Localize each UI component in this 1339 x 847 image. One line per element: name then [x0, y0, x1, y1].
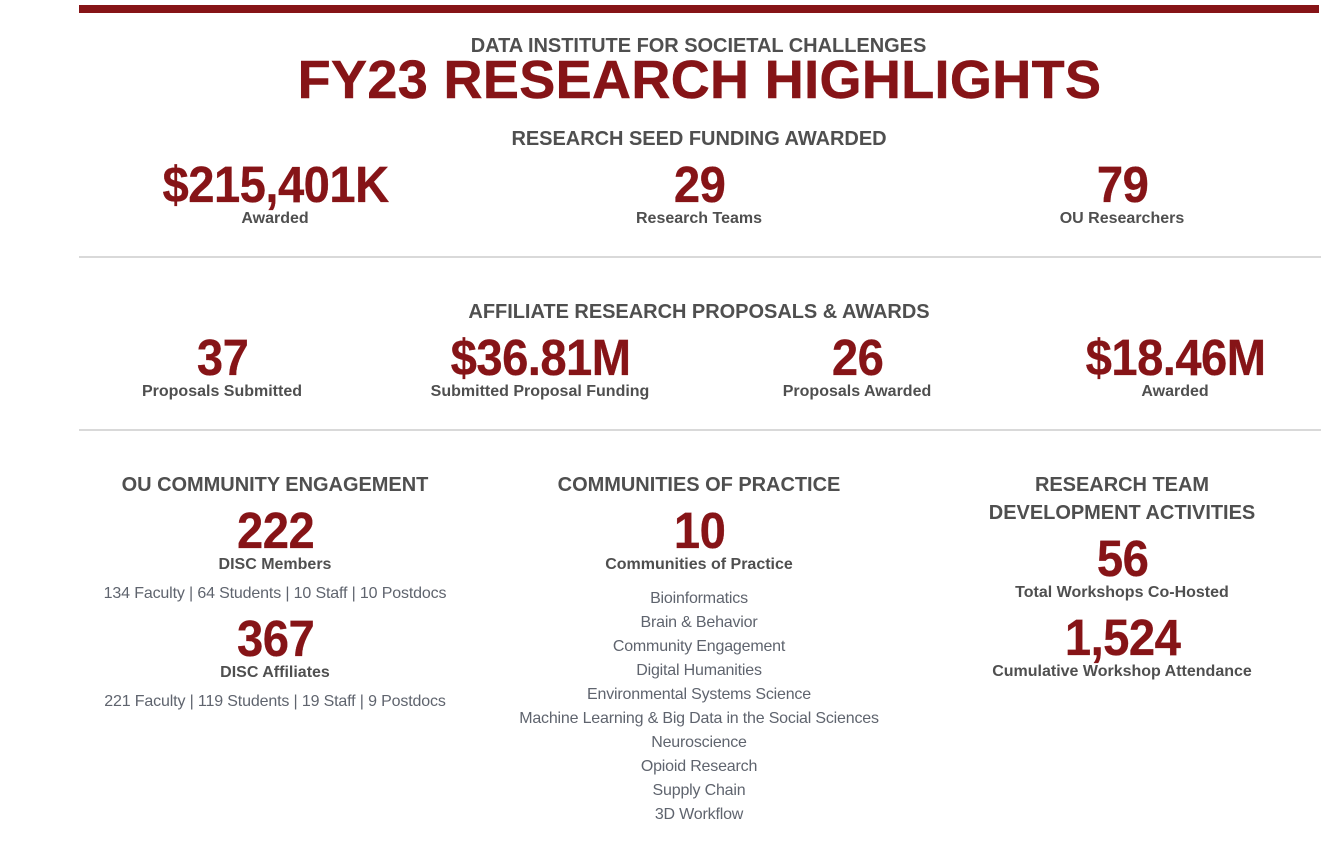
top accent bar [79, 5, 1319, 13]
stat: submitted proposal funding: Submitted Proposal Funding [431, 383, 649, 400]
heading: DEVELOPMENT ACTIVITIES [989, 502, 1255, 524]
heading [989, 474, 1255, 524]
heading: RESEARCH TEAM [1035, 474, 1209, 496]
panel: OU community engagement [104, 474, 446, 710]
list of communities: Environmental Systems Science [587, 686, 811, 703]
stat: research teams: 29 [674, 156, 725, 213]
stat: OU researchers: 79 [1097, 156, 1148, 213]
title: FY23 RESEARCH HIGHLIGHTS [298, 50, 1101, 110]
heading: RESEARCH SEED FUNDING AWARDED [511, 128, 887, 150]
stat: workshop attendance: Cumulative Workshop Attendance [992, 663, 1252, 680]
list of communities: Machine Learning & Big Data in the Social Sciences [519, 710, 879, 727]
heading: COMMUNITIES OF PRACTICE [558, 474, 840, 496]
stat: proposals awarded: 26 [832, 329, 883, 386]
stat: proposals submitted: 37 [197, 329, 248, 386]
stat: proposals awarded [783, 329, 931, 400]
panel: affiliate research proposals and awards [142, 301, 1266, 400]
stat: communities of practice [605, 502, 793, 573]
list of communities: Supply Chain [653, 782, 745, 799]
stat: DISC members: 222 [237, 502, 314, 559]
stat: OU researchers: OU Researchers [1060, 210, 1184, 227]
list of communities: Community Engagement [613, 638, 785, 655]
list of communities: Digital Humanities [636, 662, 762, 679]
list of communities: Opioid Research [641, 758, 757, 775]
affiliate breakdown: 221 Faculty | 119 Students | 19 Staff | 9 Postdocs [104, 693, 446, 710]
stat: proposals awarded: Proposals Awarded [783, 383, 931, 400]
member breakdown: 134 Faculty | 64 Students | 10 Staff | 10 Postdocs [104, 585, 446, 602]
heading: OU COMMUNITY ENGAGEMENT [122, 474, 428, 496]
heading: AFFILIATE RESEARCH PROPOSALS & AWARDS [468, 301, 930, 323]
stat: DISC members: DISC Members [219, 556, 331, 573]
header [298, 35, 1101, 110]
stat: amount awarded: Awarded [241, 210, 309, 227]
stat: amount awarded: $215,401K [163, 156, 389, 213]
list of communities [519, 590, 879, 823]
list of communities: Neuroscience [651, 734, 747, 751]
stat: awarded: $18.46M [1086, 329, 1266, 386]
stat: workshop attendance: 1,524 [1065, 609, 1180, 666]
stat: proposals submitted: Proposals Submitted [142, 383, 302, 400]
panel: communities of practice [519, 474, 879, 823]
panel: research team development activities [989, 474, 1255, 680]
stat: DISC affiliates [104, 610, 446, 710]
stat: research teams: Research Teams [636, 210, 762, 227]
stat: workshops co-hosted: 56 [1097, 530, 1148, 587]
list of communities: Brain & Behavior [640, 614, 758, 631]
stat: proposals submitted [142, 329, 302, 400]
list of communities: Bioinformatics [650, 590, 748, 607]
stat: workshops co-hosted [1015, 530, 1229, 601]
subtitle: DATA INSTITUTE FOR SOCIETAL CHALLENGES [471, 35, 926, 57]
stat: communities of practice: Communities of Practice [605, 556, 793, 573]
list of communities: 3D Workflow [655, 806, 743, 823]
stat: research teams [636, 156, 762, 227]
stat: awarded: Awarded [1141, 383, 1209, 400]
stat: DISC members [104, 502, 446, 602]
panel: research seed funding [163, 128, 1184, 227]
stat: workshops co-hosted: Total Workshops Co-Hosted [1015, 584, 1229, 601]
stat: DISC affiliates: DISC Affiliates [220, 664, 330, 681]
stat: OU researchers [1060, 156, 1184, 227]
stat: submitted proposal funding [431, 329, 649, 400]
stat: DISC affiliates: 367 [237, 610, 314, 667]
stat: communities of practice: 10 [674, 502, 725, 559]
stat: submitted proposal funding: $36.81M [451, 329, 631, 386]
stat: workshop attendance [992, 609, 1252, 680]
